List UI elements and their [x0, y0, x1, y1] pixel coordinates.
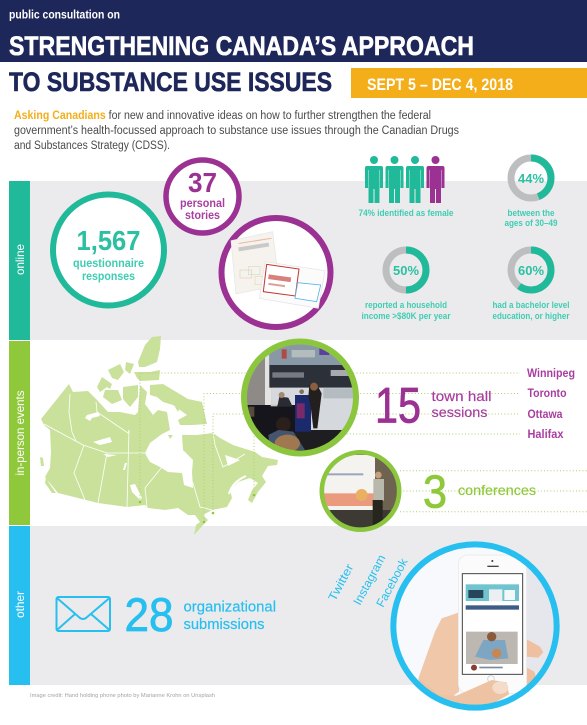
title [9, 31, 474, 97]
stat: 3 conferences: conferences [458, 482, 536, 498]
stat: 28 organizational submissions: 28 [124, 588, 174, 641]
stat: questionnaire responses [53, 194, 164, 306]
panel: other background: other [13, 591, 27, 618]
label: household income [362, 300, 451, 321]
donut: 60 percent: 60% [518, 264, 544, 278]
stat: personal stories: stories [185, 210, 220, 222]
list: cities: Halifax [528, 429, 564, 441]
stat: 28 organizational submissions: organizational [184, 600, 276, 616]
photo: hand holding phone [392, 543, 563, 715]
stat: 15 town hall sessions [375, 378, 492, 434]
stat: questionnaire responses: responses [82, 271, 135, 283]
label: household income: reported a household [365, 300, 447, 310]
photo: consultation documents [222, 218, 330, 327]
header banner [0, 0, 587, 62]
social media labels: Facebook [373, 555, 411, 609]
social media labels [325, 552, 411, 609]
list: cities: Toronto [528, 388, 566, 400]
date badge: SEPT 5 – DEC 4, 2018 [367, 76, 513, 94]
label: ages [504, 208, 558, 228]
list: cities: Winnipeg [527, 368, 575, 380]
stat: 15 town hall sessions: sessions [432, 404, 488, 420]
icon: envelope [56, 597, 110, 631]
panel: in-person events sidebar: in-person events [13, 390, 27, 476]
stat: 28 organizational submissions [124, 588, 276, 641]
dotted connector lines to cities [140, 373, 587, 522]
stat: 3 conferences: 3 [423, 466, 447, 518]
image credit: Image credit: Hand holding phone photo by Marianne Krohn on Unsplash [30, 693, 215, 699]
donut: 50 percent [386, 250, 426, 290]
label: ages: between the [508, 208, 554, 218]
intro text: Asking Canadians for new and innovative ideas on how to further strengthen the federal [14, 110, 431, 122]
social media labels: Twitter [325, 562, 356, 603]
eyebrow text: public consultation on [9, 10, 120, 22]
stat: personal stories: personal [180, 198, 225, 210]
stat: personal stories: 37 [188, 167, 217, 198]
label: education: had a bachelor level [492, 300, 570, 310]
photo: conference [320, 451, 402, 533]
donut: 44 percent: 44% [518, 172, 544, 186]
panel: in-person events sidebar [9, 341, 30, 525]
social media labels: Instagram [350, 552, 388, 607]
icon: four people, three teal and one purple [365, 156, 444, 203]
intro text: government’s health-focussed approach to substance use issues through the Canadian Drugs [14, 125, 459, 137]
stat: questionnaire responses: 1,567 [76, 225, 140, 256]
stat: 15 town hall sessions: town hall [432, 388, 492, 404]
city markers [139, 494, 255, 523]
panel: online: online [13, 244, 27, 275]
title: TO SUBSTANCE USE ISSUES [9, 67, 332, 97]
intro text: and Substances Strategy (CDSS). [14, 140, 170, 152]
label: education [492, 300, 570, 321]
stat: 28 organizational submissions: submissions [184, 617, 264, 633]
label: household income: income >$80K per year [362, 311, 451, 321]
panel: online [9, 181, 587, 340]
stat: questionnaire responses: questionnaire [73, 258, 144, 270]
list: cities: Ottawa [528, 409, 563, 421]
list: cities [527, 368, 575, 441]
intro text [14, 110, 459, 152]
donut: 44 percent [511, 158, 551, 198]
date badge [351, 68, 587, 98]
stat: 15 town hall sessions: 15 [375, 378, 421, 434]
title: STRENGTHENING CANADA’S APPROACH [9, 31, 474, 61]
donut: 60 percent [511, 250, 551, 290]
donut: 50 percent: 50% [393, 264, 419, 278]
map of Canada [40, 336, 278, 535]
stat: 3 conferences [423, 466, 536, 518]
label: ages: ages of 30–49 [504, 218, 558, 228]
label: identified as female: 74% identified as female [358, 208, 454, 218]
label: education: education, or higher [492, 311, 570, 321]
panel: other background [9, 526, 587, 685]
stat: personal stories [166, 160, 239, 233]
photo: town hall session [242, 338, 358, 460]
